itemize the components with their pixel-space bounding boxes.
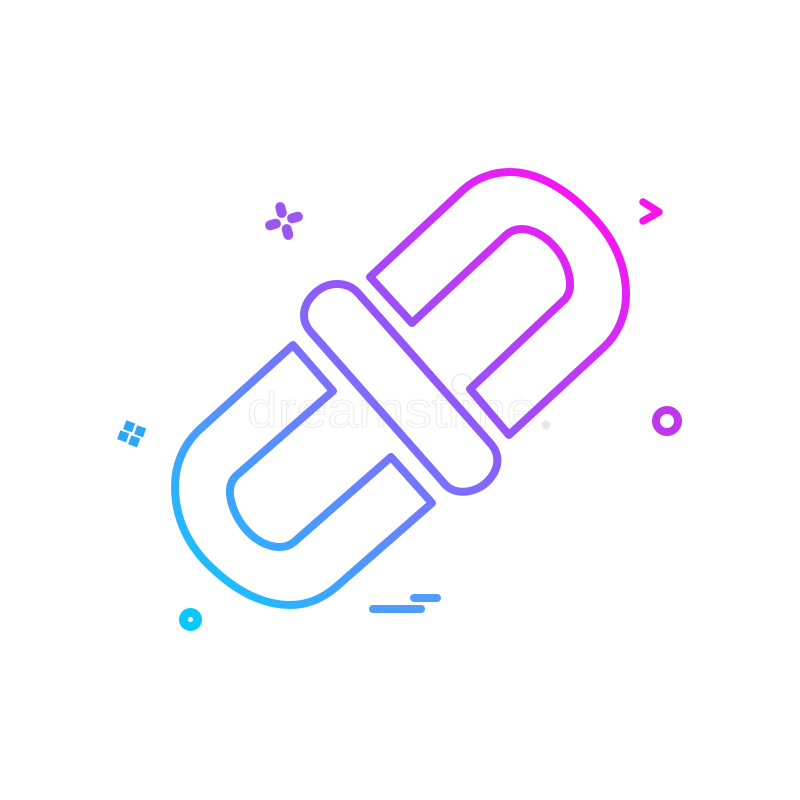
upper chain link [370,172,626,435]
watermark: dreamstime [247,382,537,438]
icon: four-petal sparkle [264,201,304,241]
icon: cyan ring [184,612,198,626]
middle connecting bar [304,284,497,492]
dashes [373,598,437,609]
lower chain link [175,345,432,605]
icon: four-square sparkle [117,420,146,447]
icon: purple ring [656,410,678,432]
icon: chevron [643,202,659,221]
